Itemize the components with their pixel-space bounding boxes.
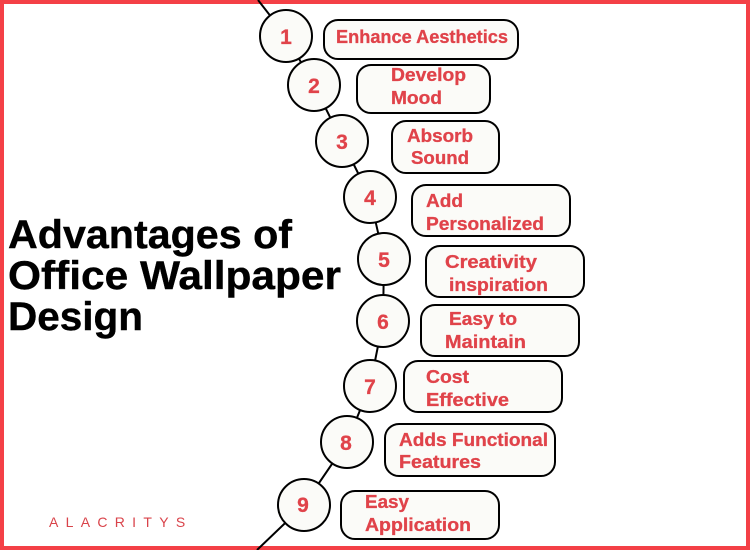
item 1	[260, 10, 518, 62]
item 2: 2	[308, 75, 320, 98]
item 4: Personalized	[426, 214, 544, 234]
item 6: Maintain	[445, 332, 526, 352]
title	[8, 213, 341, 339]
connector line	[257, 0, 384, 550]
item 9	[278, 479, 499, 539]
item 9: Easy	[365, 492, 409, 512]
item 2: Mood	[391, 88, 442, 108]
item 5: inspiration	[449, 275, 548, 295]
item 3: Absorb	[407, 126, 473, 146]
item 6: 6	[377, 311, 389, 334]
item 1: Enhance Aesthetics	[336, 27, 508, 47]
title: Design	[8, 295, 143, 339]
item 3: 3	[336, 131, 348, 154]
item 7: Effective	[426, 390, 509, 410]
title: Advantages of	[8, 213, 293, 257]
brand name: ALACRITYS	[49, 514, 192, 530]
item 8	[321, 416, 555, 476]
item 7: Cost	[426, 367, 469, 387]
item 9: Application	[365, 515, 471, 535]
item 7	[344, 360, 562, 412]
item 8: Adds Functional	[399, 430, 548, 450]
item 6	[357, 295, 579, 356]
item 4	[344, 171, 570, 236]
item 8: Features	[399, 452, 481, 472]
item 2: Develop	[391, 65, 466, 85]
item 7: 7	[364, 376, 376, 399]
item 2	[288, 59, 490, 113]
item 6: Easy to	[449, 309, 517, 329]
item 5	[358, 233, 584, 297]
item 4: 4	[364, 187, 376, 210]
item 3: Sound	[411, 148, 469, 168]
item 3	[316, 115, 499, 173]
item 5: 5	[378, 249, 390, 272]
item 8: 8	[340, 432, 352, 455]
item 5: Creativity	[445, 252, 537, 272]
item 4: Add	[426, 191, 463, 211]
item 9: 9	[297, 494, 309, 517]
title: Office Wallpaper	[8, 254, 341, 298]
item 1: 1	[280, 26, 292, 49]
